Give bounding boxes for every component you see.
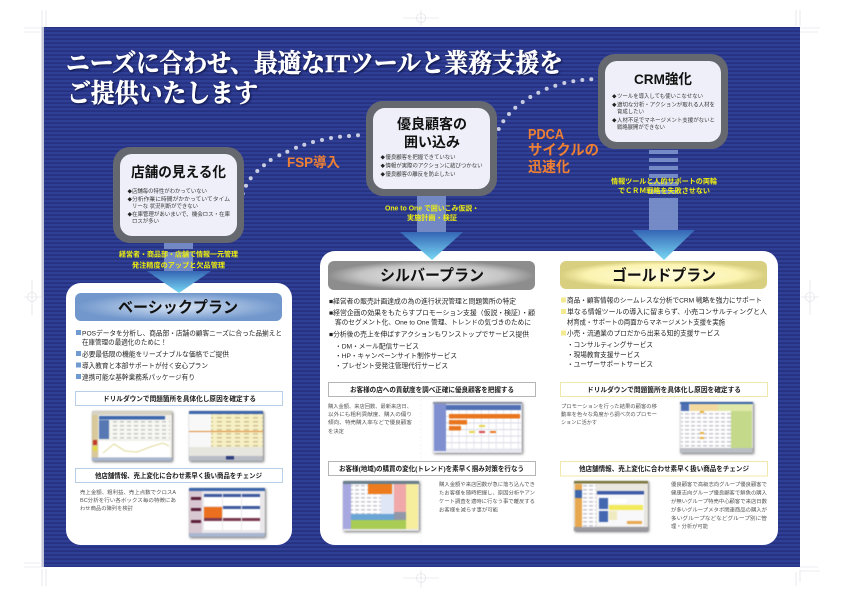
text: customer groups: が多いグループメタボ関連商品の購入が [671,506,768,514]
feature list: silver plan: ・プレゼント受発注管理代行サービス [335,361,448,370]
card: retaining loyal customers: 優良顧客を把握できていない [386,153,456,161]
arrow stem: silver [417,196,446,233]
card: store visibility: ◆ [128,189,132,194]
heading: basic plan: ベーシックプラン [118,298,238,316]
feature list: gold plan [561,296,767,368]
card: store visibility [113,147,244,243]
text: customer groups: 健康志向グループ優良顧客で鮮魚の購入 [671,488,768,496]
sub-heading: gold other stores [560,462,768,476]
arrow head: gold [632,230,695,260]
text: cross ABC analysis: わせ商品の陳列を検討 [80,504,134,512]
text: contribution: 購入金額、来店回数、最新来店日、 [328,402,412,410]
feature list: gold plan: ・コンサルティングサービス [567,340,653,349]
text: contribution: 傾向、特売購入率などで優良顧客 [328,418,413,426]
feature list: silver plan: ■分析後の売上を伸ばすアクションもワンストップでサービス提供 [329,330,529,338]
card: store visibility: ◆ [128,212,132,217]
label: FSP: FSP導入 [287,154,340,170]
feature list: silver plan [329,296,535,370]
feature list: basic plan [76,328,282,382]
text: promotion [561,402,658,426]
text: trend: 購入金額や来店回数が急に落ち込んでき [439,480,535,488]
label: PDCA: 迅速化 [528,159,570,176]
title: ニーズに合わせ、最適なITツールと業務支援を [66,49,563,78]
text: trend [439,480,535,514]
caption: basic arrow: 経営者・商品部・店舗で情報一元管理 [119,250,238,258]
text: cross ABC analysis: 売上金額、粗利益、売上点数でクロスA [80,488,176,496]
label: PDCA: サイクルの [528,142,599,159]
feature list: gold plan: ・現場教育支援サービス [567,350,640,359]
feature list: silver plan: ・DM・メール配信サービス [335,342,419,350]
sub-heading: other stores: 他店舗情報、売上変化に合わせ素早く扱い商品をチェンジ [95,471,262,480]
panel: silver and gold plans [320,251,778,545]
feature list: gold plan: 単なる情報ツールの導入に留まらず、小売コンサルティングと人 [567,307,767,316]
text: customer groups: が無いグループ特売中心顧客で来店日数 [671,497,768,505]
sub-heading: gold drill-down [560,382,768,396]
text: customer groups [671,480,768,530]
card: store visibility: リーな 状況判断ができない [132,202,198,210]
card: CRM: ツールを導入しても使いこなせない [617,92,703,100]
card: retaining loyal customers: 優良顧客の離反を防止したい [386,170,456,178]
card: CRM: ◆ [612,118,617,123]
caption: basic arrow [119,250,238,270]
caption: silver arrow: One to One で囲いこみ仮説・ [385,204,479,212]
card: store visibility: 在庫管理があいまいで、機会ロス・在庫 [132,210,230,218]
text: promotion: ションに活かす [561,418,597,426]
card: retaining loyal customers: ◆ [380,172,386,177]
screenshot: promotion table [680,402,753,453]
dotted arc: loyal customers to CRM [493,77,593,149]
text: trend: ケート調査を適時に行なう事で離反する [439,497,535,505]
sub-heading: trend: お客様(地域)の購買の変化(トレンド)を素早く掴み対策を行なう [339,464,524,473]
text: promotion: プロモーションを行った結果の顧客の移 [561,402,658,410]
panel: basic plan [66,283,292,545]
feature list: basic plan: 在庫管理の最適化のために！ [82,338,167,346]
text: trend: お客様を減らす事が可能 [439,506,499,514]
card: CRM: CRM強化 [634,71,692,87]
text: promotion: 動率を色々な角度から調べ次のプロモー [561,410,657,418]
card: CRM: 育成したい [617,108,644,116]
caption: silver arrow: 実施計画・検証 [407,213,457,222]
sub-heading: drill-down [76,392,282,406]
card: CRM: ◆ [612,94,617,99]
label: PDCA [528,127,599,176]
card: store visibility: 店舗毎の特性がわかっていない [132,187,207,195]
card: retaining loyal customers [366,101,497,196]
text: customer groups: 優良顧客で高級志向グループ優良顧客で [671,480,767,488]
text: contribution: を決定 [328,427,345,435]
sub-heading: drill-down: ドリルダウンで問題箇所を具体化し原因を確定する [103,394,256,403]
text: contribution: 以外にも粗利貢献度、購入の偏り [328,410,412,418]
card: retaining loyal customers: 囲い込み [404,134,460,150]
heading: gold plan: ゴールドプラン [612,266,716,284]
text: customer groups: 多いグループなどなどグループ別に管 [671,514,768,522]
feature list: gold plan: 商品・顧客情報のシームレスな分析でCRM 戦略を強力にサポート [567,296,762,304]
title [66,49,563,108]
dotted arc: store visibility to loyal customers [239,133,360,205]
card: retaining loyal customers: 情報が実際のアクションに結びつかない [386,162,483,170]
feature list: basic plan: 導入教育と本部サポートが付く安心プラン [82,361,208,370]
caption: silver arrow [385,204,479,222]
feature list: silver plan: 客のセグメント化、One to One 管理、トレンドの気づきのために [335,318,531,326]
screenshot: trend heatmap [343,481,419,531]
text: cross ABC analysis [80,488,176,512]
arrow head: basic [147,271,211,293]
sub-heading: gold other stores: 他店舗情報、売上変化に合わせ素早く扱い商品をチェンジ [579,464,749,473]
feature list: basic plan: 連携可能な基幹業務系パッケージ有り [82,372,195,382]
sub-heading: contribution [328,382,536,396]
arrow stem: gold [649,150,678,232]
caption: basic arrow: 発注精度のアップと欠品管理 [132,260,225,270]
heading: silver plan [328,261,535,290]
text: contribution [328,402,413,435]
card: store visibility: ロスが多い [132,217,159,225]
card: retaining loyal customers: ◆ [380,155,386,160]
text: trend: たお客様を随時把握し、原因分析やアン [439,488,535,496]
feature list: silver plan: ■経営者の販売計画達成の為の進行状況管理と問題箇所の特定 [329,296,516,306]
card: CRM [598,54,728,149]
caption: gold arrow [611,176,717,195]
card: CRM: 戦略展開ができない [617,123,665,131]
sub-heading: contribution: お客様の店への貢献度を調べ正確に優良顧客を把握する [350,385,514,394]
sub-heading: gold drill-down: ドリルダウンで問題箇所を具体化し原因を確定する [587,385,741,394]
sub-heading: trend [328,462,536,476]
card: CRM: 適切な分析・アクションが取れる人材を [617,100,715,108]
screenshot: ABC boxes [189,488,265,537]
card: retaining loyal customers: 優良顧客の [397,116,467,132]
card: store visibility: 分析作業に時間がかかっていてタイム [132,195,230,203]
text: customer groups: 理・分析が可能 [671,522,709,530]
screenshot: yellow table [189,411,263,461]
heading: silver plan: シルバープラン [380,266,484,284]
text: cross ABC analysis: BC分析を行い各ボックス毎の特徴にあ [80,496,176,504]
caption: gold arrow: 情報ツールと人的サポートの両輪 [611,176,717,186]
card: store visibility: 店舗の見える化 [131,164,226,180]
heading: basic plan [75,293,282,321]
screenshot: customer group dialog [574,481,648,531]
feature list: basic plan: POSデータを分析し、商品部・店舗の顧客ニーズに合った品揃えと [82,328,282,338]
sub-heading: other stores [76,468,282,482]
card: CRM: 人材不足でマネージメント支援がないと [617,116,715,124]
label: PDCA: PDCA [528,127,564,143]
feature list: gold plan: ・ユーザーサポートサービス [567,360,653,368]
card: store visibility: ◆ [128,197,132,202]
caption: gold arrow: でＣＲＭ戦略を失敗させない [618,186,710,195]
feature list: silver plan: ・HP・キャンペーンサイト制作サービス [335,351,457,360]
feature list: basic plan: 必要最低限の機能をリーズナブルな価格でご提供 [82,350,229,358]
heading: gold plan [560,261,767,289]
feature list: gold plan: 小売・流通業のプロだから出来る知的支援サービス [567,328,720,338]
screenshot: contribution matrix [433,402,522,453]
card: retaining loyal customers: ◆ [380,164,386,168]
feature list: silver plan: ■経営企画の効果をもたらすプロモーション支援（仮説・検証）・顧 [329,308,535,317]
feature list: gold plan: 材育成・サポートの両面からマネージメント支援を実施 [567,318,725,326]
arrow head: silver [400,232,463,260]
arrow stem: basic [164,243,193,272]
title: ご提供いたします [67,79,258,108]
screenshot: table and line chart [92,411,172,461]
card: CRM: ◆ [612,102,617,108]
